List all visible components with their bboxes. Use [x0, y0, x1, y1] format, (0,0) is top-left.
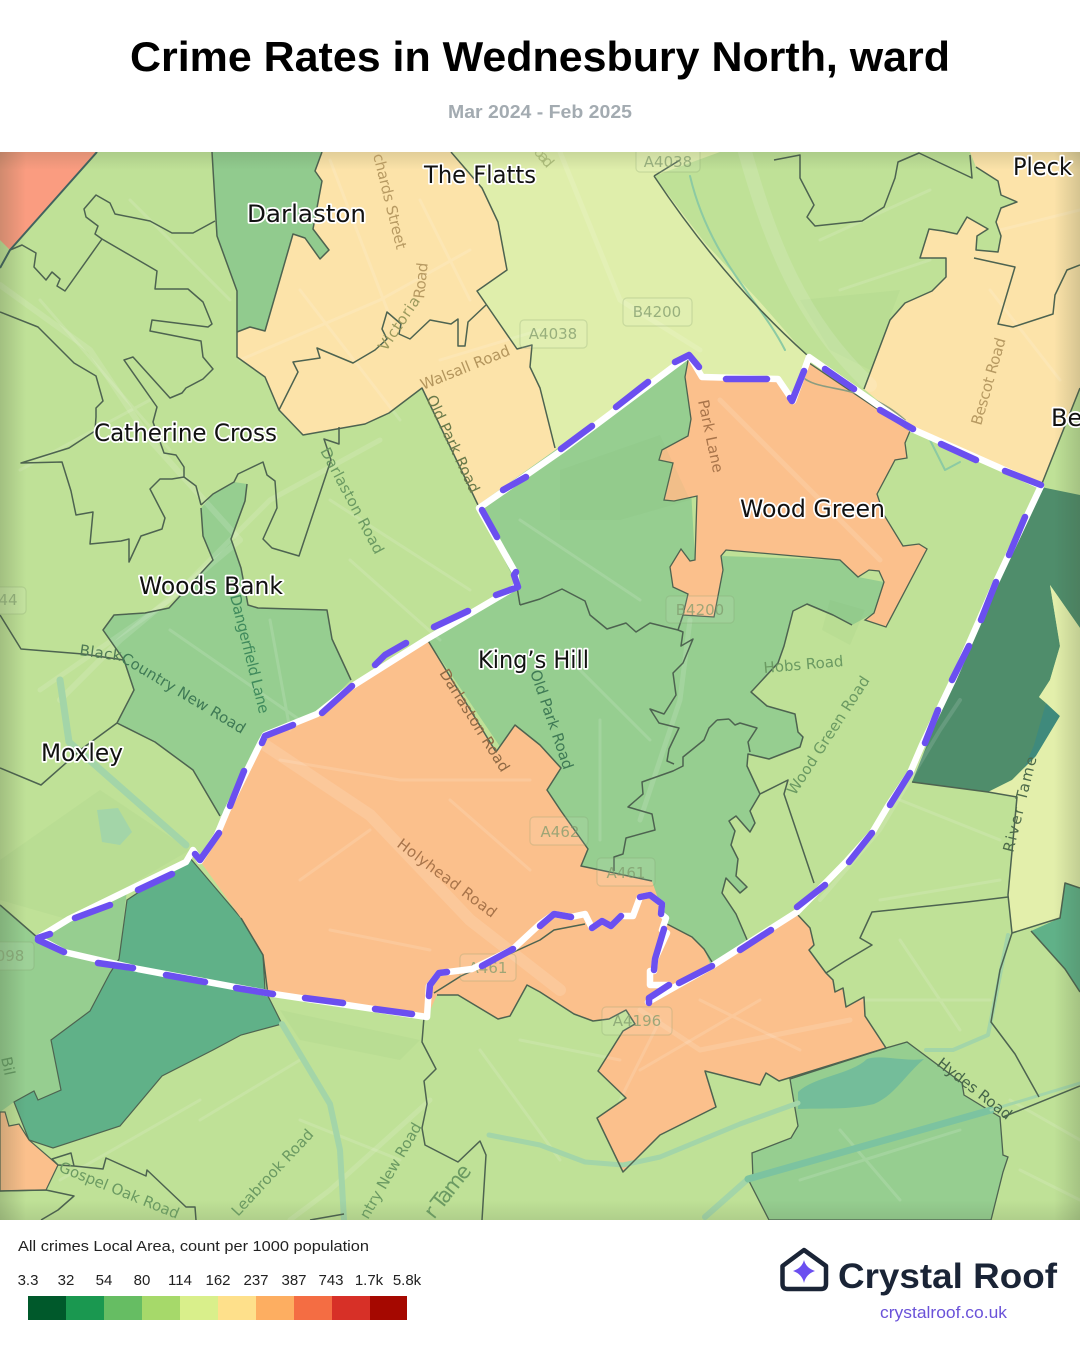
road number shields: [0, 146, 734, 1035]
region: north-west high-crime area: [0, 152, 97, 250]
place name labels: Woods Bank: [139, 572, 283, 600]
road name labels: Gospel Oak Road: [57, 1158, 182, 1223]
region: Pleck and Bescot pale area: [864, 152, 1080, 486]
legend: value labels: 162: [205, 1272, 231, 1289]
road name labels: River Tame: [999, 755, 1041, 854]
region: far-east dark green: [1031, 883, 1080, 992]
place name labels: The Flatts: [423, 161, 536, 189]
road name labels: Holyhead Road: [394, 835, 500, 921]
legend: value labels: 743: [318, 1272, 344, 1289]
road number shields: A4038: [529, 325, 577, 343]
road name labels: Road: [410, 262, 432, 299]
region: teal sliver: [1024, 703, 1060, 768]
region: south-east medium green: [748, 1042, 1008, 1220]
road name labels: Dangerfield Lane: [226, 593, 273, 715]
region: east pale strip: [988, 585, 1080, 933]
region: Darlaston pale area: [237, 152, 561, 507]
legend: value labels: [18, 1272, 422, 1289]
subtle parks and land-use patches: [660, 449, 688, 500]
water: lake in south-east: [798, 1057, 924, 1109]
road name labels: Country New Road: [118, 649, 249, 738]
road name labels: Victoria: [374, 293, 424, 354]
subtitle: date range: Mar 2024 - Feb 2025: [448, 101, 632, 122]
place name labels: Catherine Cross: [94, 419, 277, 447]
region: south-west orange: [0, 1112, 58, 1191]
road number shields: A461: [469, 959, 507, 977]
place name labels: Wood Green: [740, 495, 885, 523]
region: King's Hill medium green: [427, 355, 884, 968]
place name labels: Pleck: [1013, 153, 1072, 181]
region: east darkest green: [912, 487, 1080, 792]
legend title: All crimes Local Area, count per 1000 population: [18, 1238, 369, 1255]
road name labels: Leabrook Road: [228, 1126, 317, 1220]
road name labels: Hobs Road: [763, 652, 844, 677]
region: south-west dark green: [14, 858, 282, 1148]
icon: Crystal Roof house logo: [782, 1250, 826, 1289]
road name labels: Old Park Road: [422, 392, 483, 496]
region: The Flatts light area: [451, 152, 808, 451]
legend: value labels: 114: [168, 1272, 192, 1289]
legend: value labels: 3.3: [18, 1272, 38, 1289]
road name labels: ntry New Road: [356, 1119, 425, 1222]
region: west medium green: [0, 890, 127, 1112]
road number shields: A4196: [613, 1012, 661, 1030]
place name labels: [41, 153, 1080, 767]
brand name: Crystal Roof: [838, 1257, 1057, 1296]
pond: [97, 808, 132, 845]
website link text: crystalroof.co.uk: [880, 1304, 1008, 1322]
district boundary lines: [0, 152, 1080, 1220]
road name labels: Old Park Road: [526, 667, 577, 772]
legend: value labels: 1.7k: [355, 1272, 384, 1289]
road name labels: Wood Green Road: [783, 673, 874, 798]
road name labels: Walsall Road: [418, 341, 513, 394]
place name labels: Darlaston: [247, 200, 366, 228]
region: Wood Green orange: [659, 355, 927, 627]
region: Darlaston green: [212, 152, 329, 332]
legend: value labels: 237: [243, 1272, 269, 1289]
ward boundary: white casing: [38, 355, 1041, 1017]
legend: value labels: 5.8k: [393, 1272, 422, 1289]
legend: value labels: 387: [281, 1272, 307, 1289]
region: Woods Bank green: [103, 482, 351, 816]
place name labels: Moxley: [41, 739, 123, 767]
road name labels: Bescot Road: [968, 336, 1010, 427]
road name labels: Park Lane: [694, 398, 727, 474]
legend: value labels: 32: [58, 1272, 74, 1289]
road number shields: B4200: [633, 303, 681, 321]
road number shields: A462: [541, 823, 579, 841]
title: Crime Rates in Wednesbury North, ward: [130, 33, 950, 80]
road number shields: A461: [607, 864, 645, 882]
legend: value labels: 54: [96, 1272, 112, 1289]
road name labels: Hydes Road: [934, 1054, 1016, 1124]
place name labels: King’s Hill: [478, 646, 589, 674]
road name labels: r Tame: [419, 1159, 476, 1223]
legend: colour scale: [28, 1296, 407, 1320]
region: Holyhead Road orange: [200, 639, 886, 1172]
road name labels: oad: [530, 143, 558, 171]
road network: [0, 152, 1080, 1220]
waterways and rail: [60, 176, 1080, 1220]
road name labels: Darlaston Road: [436, 666, 513, 775]
road number shields: A4038: [644, 153, 692, 171]
legend: value labels: 80: [134, 1272, 150, 1289]
ward boundary: purple dashes: [38, 355, 1041, 1014]
road name labels: [0, 143, 1041, 1223]
edge vignette: [0, 152, 1080, 1220]
road name labels: chards Street: [369, 152, 410, 251]
road name labels: Darlaston Road: [316, 444, 388, 557]
road number shields: B4200: [676, 601, 724, 619]
road name labels: Black: [78, 641, 123, 665]
